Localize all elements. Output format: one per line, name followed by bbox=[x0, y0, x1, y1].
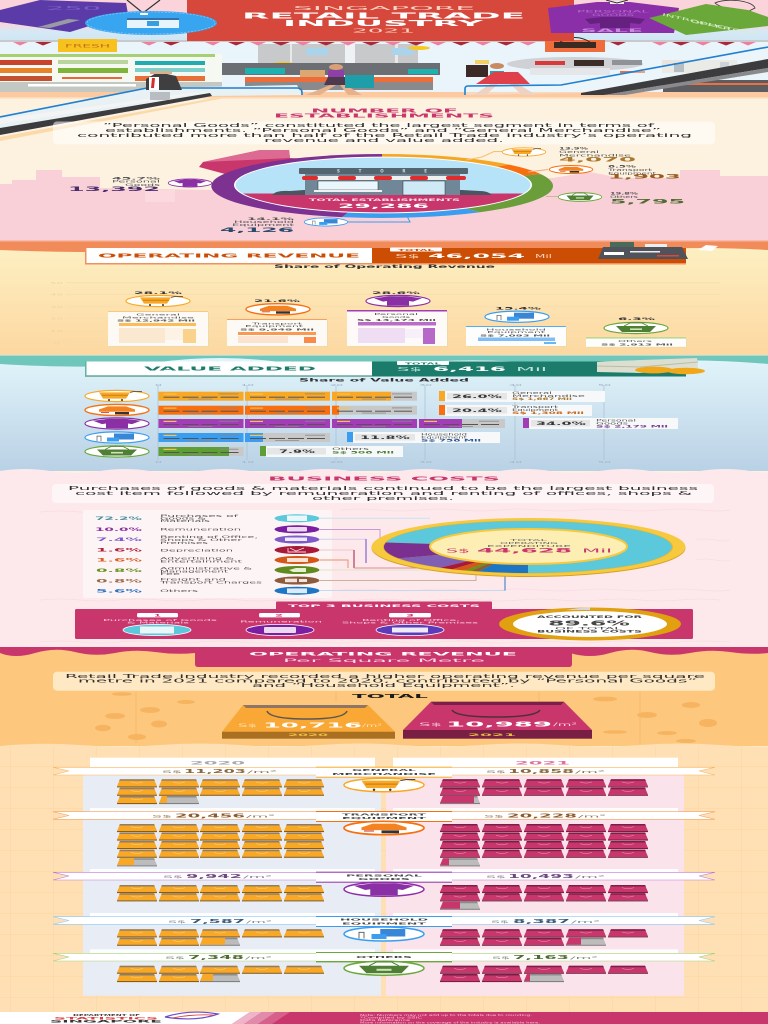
cost row: others: 5.6% bbox=[96, 588, 143, 594]
store illustration bbox=[299, 168, 468, 195]
row: transport equipment: TRANSPORT bbox=[342, 812, 430, 816]
text block: establishments summary: contributed more than half of the Retail Trade industry’s operating bbox=[77, 133, 693, 139]
column: personal goods: Goods bbox=[382, 315, 411, 319]
tag: blue price tag bbox=[85, 0, 217, 35]
section background: revenue per square metre bbox=[0, 647, 768, 746]
axis labels: operating revenue: 0 bbox=[53, 342, 61, 346]
row: household equipment: /m² bbox=[246, 920, 274, 924]
callout: household equipment: 4,126 bbox=[220, 226, 296, 234]
heading tab: operating revenue per square metre: OPERATING REVENUE bbox=[249, 652, 517, 658]
column: general merchandise: Merchandise bbox=[122, 315, 195, 319]
pink city skyline bbox=[0, 170, 768, 240]
value added row: transport equipment: Equipment bbox=[512, 408, 560, 412]
text block: business costs summary: cost item followed by remuneration and renting of offices, shops & bbox=[75, 491, 694, 497]
callout: general merchandise: General bbox=[559, 150, 599, 154]
cost row: freight: Freight and bbox=[160, 578, 226, 582]
shopping bag: 2021 total bbox=[403, 702, 592, 739]
panel: 2020 column: 2020 bbox=[190, 761, 245, 767]
column: household equipment: Household bbox=[486, 327, 546, 331]
top cost 3: Renting of Office, bbox=[362, 618, 460, 622]
axis labels: value added: 30 bbox=[419, 460, 433, 464]
pie chart: operating expenditure bbox=[372, 518, 686, 577]
top cost 3 bbox=[342, 613, 480, 636]
tag: personal goods sale: PERSONAL bbox=[577, 10, 649, 14]
logo: department of statistics singapore bbox=[50, 1012, 218, 1023]
axis labels: value added: 40 bbox=[509, 460, 523, 464]
callout: accounted for 89.6%: ACCOUNTED FOR bbox=[537, 615, 643, 619]
cost row: renting: Renting of Office, bbox=[160, 535, 258, 539]
icon: banknotes and coins bbox=[597, 358, 705, 374]
header bar: operating revenue bbox=[85, 248, 686, 264]
cost row: freight bbox=[96, 576, 320, 585]
panel: cost list bbox=[83, 510, 332, 598]
header: supermarket shelves bbox=[0, 54, 222, 92]
callout: personal goods: 45.7% bbox=[112, 176, 162, 180]
footer notes: Note: Numbers may not add up to the totals due to rounding. bbox=[360, 1014, 533, 1017]
cost row: freight: 0.8% bbox=[96, 578, 143, 584]
cost row: administrative: 0.8% bbox=[96, 568, 143, 574]
value added row: others bbox=[85, 446, 403, 457]
cost row: purchases bbox=[95, 514, 320, 523]
callout: household equipment: 14.1% bbox=[247, 217, 296, 221]
value added row: household equipment: S$ 756 Mil bbox=[421, 439, 481, 443]
cost row: renting: Premises bbox=[160, 541, 209, 545]
top cost 1: 1 bbox=[154, 614, 161, 618]
row: personal goods bbox=[53, 872, 715, 910]
row: others: 7,163 bbox=[513, 955, 569, 961]
row: general merchandise: /m² bbox=[575, 770, 608, 774]
header bar: operating revenue: OPERATING REVENUE bbox=[98, 253, 362, 259]
row: others: OTHERS bbox=[356, 955, 412, 959]
row: household equipment: HOUSEHOLD bbox=[340, 918, 430, 922]
axis labels: operating revenue bbox=[50, 281, 64, 346]
cost row: remuneration bbox=[95, 525, 320, 533]
shopping bag: 2021 total: 2021 bbox=[468, 732, 518, 737]
total establishments bbox=[309, 198, 462, 210]
cost row: advertising: Advertising & bbox=[160, 557, 236, 561]
shopping bag: 2020 total bbox=[222, 705, 395, 739]
panel: 2020 column bbox=[83, 758, 381, 996]
tag: green introductory offer: INTRODUCTORY bbox=[662, 13, 759, 37]
value added row: general merchandise: S$ 1,667 Mil bbox=[512, 397, 572, 401]
sign: basket bbox=[545, 38, 605, 52]
row: transport equipment: S$ bbox=[484, 815, 504, 819]
value added row: general merchandise: 26.0% bbox=[452, 394, 502, 399]
value added row: household equipment: Equipment bbox=[421, 436, 469, 440]
cost row: remuneration: Remuneration bbox=[160, 528, 241, 532]
cost row: freight: Transport Charges bbox=[156, 581, 263, 585]
panel: 2021 column bbox=[386, 758, 684, 996]
tag: purple phone tag: 250 bbox=[46, 6, 101, 12]
row: personal goods: /m² bbox=[575, 875, 608, 879]
heading: number of establishments: NUMBER OF bbox=[311, 108, 458, 114]
callout: household equipment: Household bbox=[234, 220, 294, 224]
text block: establishments summary: revenue and value added. bbox=[264, 138, 505, 144]
axis labels: value added: 50 bbox=[598, 460, 612, 464]
axis labels: value added: 20 bbox=[330, 383, 344, 387]
row: general merchandise bbox=[53, 767, 715, 804]
shopping bag: 2020 total: /m² bbox=[362, 723, 383, 729]
value added row: others: S$ 506 Mil bbox=[332, 451, 394, 455]
callout: others: 19.8% bbox=[610, 192, 639, 196]
heading: share of operating revenue: Share of Operating Revenue bbox=[274, 264, 495, 270]
row: household equipment: 7,587 bbox=[190, 919, 245, 925]
title block bbox=[187, 0, 574, 41]
row: general merchandise: S$ bbox=[486, 770, 506, 774]
row: household equipment: /m² bbox=[571, 920, 603, 924]
header bar: operating revenue: 46,054 bbox=[428, 253, 528, 260]
heading: business costs: BUSINESS COSTS bbox=[268, 476, 501, 482]
footer notes bbox=[360, 1014, 541, 1024]
cost row: advertising: Entertainment bbox=[160, 560, 245, 564]
column: transport equipment bbox=[227, 299, 328, 347]
column: others: Others bbox=[618, 339, 653, 343]
top cost 2: 2 bbox=[275, 614, 283, 618]
chart grid: value added bbox=[158, 385, 604, 460]
shopping bag: 2021 total: 10,989 bbox=[446, 720, 553, 728]
row: others: S$ bbox=[492, 956, 510, 960]
callout: others: Others bbox=[610, 195, 639, 199]
callout: general merchandise: 4,070 bbox=[559, 156, 638, 164]
column: household equipment: S$ 7,093 Mil bbox=[480, 333, 550, 337]
header bar: value added bbox=[85, 361, 686, 376]
column: personal goods bbox=[347, 291, 448, 347]
sign: fresh bbox=[58, 39, 117, 52]
axis labels: value added: 40 bbox=[509, 383, 523, 387]
footprints decoration bbox=[95, 692, 717, 743]
value added row: personal goods: S$ 2,179 Mil bbox=[596, 425, 668, 429]
cost row: purchases: Goods & bbox=[160, 516, 208, 520]
row: personal goods: S$ bbox=[163, 875, 183, 879]
pie chart: operating expenditure: S$ bbox=[446, 548, 471, 554]
title block: SINGAPORE bbox=[293, 6, 478, 12]
logo: department of statistics singapore: STATISTICS bbox=[54, 1016, 160, 1020]
row: personal goods: /m² bbox=[243, 875, 275, 879]
value added row: personal goods: Personal bbox=[596, 419, 636, 423]
row: personal goods: 10,493 bbox=[508, 874, 574, 880]
tag: personal goods sale: SALE bbox=[581, 28, 643, 34]
callout: household equipment bbox=[220, 216, 410, 234]
value added row: transport equipment: 20.4% bbox=[452, 408, 502, 413]
man on escalator bbox=[146, 71, 182, 100]
top cost 1: & Materials bbox=[127, 620, 191, 624]
callout: transport equipment: 6.5% bbox=[608, 164, 638, 168]
white strips between rows bbox=[90, 808, 678, 953]
column: general merchandise: 28.1% bbox=[134, 291, 184, 295]
column: transport equipment: Transport bbox=[248, 321, 305, 325]
axis labels: operating revenue: 10 bbox=[50, 329, 64, 333]
total establishments: TOTAL ESTABLISHMENTS bbox=[309, 198, 462, 202]
column: transport equipment: Equipment bbox=[245, 324, 306, 328]
callout: personal goods: Goods bbox=[125, 183, 161, 187]
cost row: depreciation: 1.6% bbox=[96, 548, 143, 554]
connector lines bbox=[320, 518, 505, 590]
text block: revenue per square metre summary bbox=[53, 672, 715, 691]
total establishments: 29,286 bbox=[338, 202, 431, 210]
callout: household equipment: Equipment bbox=[232, 223, 296, 227]
callout: transport equipment: Equipment bbox=[608, 171, 658, 175]
cost row: purchases: Materials bbox=[160, 519, 211, 523]
text block: revenue per square metre summary: and “Household Equipment”. bbox=[252, 683, 516, 689]
callout: general merchandise: Merchandise bbox=[559, 153, 631, 157]
axis labels: operating revenue: 50 bbox=[50, 281, 64, 285]
woman in red dress bbox=[466, 60, 536, 95]
row: transport equipment: S$ bbox=[152, 815, 172, 819]
heading: number of establishments bbox=[274, 108, 496, 119]
cost row: remuneration: 10.0% bbox=[95, 527, 143, 533]
callout: accounted for 89.6%: OF TOTAL bbox=[555, 626, 623, 630]
axis labels: operating revenue: 20 bbox=[50, 317, 64, 321]
cost row: advertising bbox=[96, 556, 320, 564]
row: general merchandise: 10,858 bbox=[508, 769, 576, 775]
row: others: /m² bbox=[245, 956, 274, 960]
tag: personal goods sale bbox=[548, 0, 679, 34]
row: transport equipment: 20,228 bbox=[507, 814, 579, 820]
pie chart: operating expenditure: OPERATING bbox=[500, 541, 560, 545]
value added row: others: 7.9% bbox=[279, 449, 315, 454]
callout: transport equipment: Transport bbox=[605, 168, 654, 172]
cost row: administrative: Management bbox=[160, 569, 230, 573]
callout: personal goods bbox=[68, 176, 212, 193]
cost row: administrative bbox=[96, 566, 320, 576]
row: general merchandise: MERCHANDISE bbox=[332, 772, 436, 776]
footer notes: *Compiled by SSIC bbox=[360, 1016, 423, 1019]
row: household equipment: EQUIPMENT bbox=[342, 921, 430, 925]
left escalator bbox=[0, 85, 302, 141]
row: household equipment bbox=[53, 916, 715, 946]
row: others: S$ bbox=[165, 956, 185, 960]
column: household equipment: 15.4% bbox=[495, 306, 542, 310]
cost row: purchases: Purchases of bbox=[160, 514, 241, 518]
value added row: others: Others bbox=[332, 447, 370, 451]
value added row: household equipment: Household bbox=[421, 433, 467, 437]
shopping bag: 2020 total: 2020 bbox=[288, 732, 329, 737]
pie chart: operating expenditure: TOTAL bbox=[506, 538, 548, 542]
cost row: depreciation: Depreciation bbox=[160, 548, 233, 552]
section background: value added bbox=[0, 355, 768, 471]
axis labels: value added: 10 bbox=[241, 383, 255, 387]
header bar: operating revenue: TOTAL bbox=[398, 248, 435, 252]
axis labels: operating revenue: 30 bbox=[50, 305, 64, 309]
panel: top 3 business costs bbox=[75, 602, 693, 639]
axis labels: value added: 50 bbox=[598, 383, 612, 387]
cost row: renting bbox=[96, 535, 320, 545]
logo: department of statistics singapore: SINGAPORE bbox=[50, 1019, 162, 1023]
axis labels: value added: 10 bbox=[241, 460, 255, 464]
header bar: value added: 6,416 bbox=[433, 366, 506, 373]
value added row: personal goods: Goods bbox=[596, 422, 629, 426]
shopping bag: 2021 total: S$ bbox=[419, 722, 442, 728]
woman with box bbox=[300, 64, 374, 95]
tag: purple phone tag bbox=[0, 0, 128, 32]
row: household equipment: S$ bbox=[168, 920, 186, 924]
sign: fresh: FRESH bbox=[65, 44, 110, 48]
axis labels: value added: 20 bbox=[330, 460, 344, 464]
right escalator bbox=[465, 47, 768, 95]
value added row: personal goods bbox=[85, 418, 678, 429]
escalator glass, right bbox=[464, 48, 768, 95]
row: transport equipment bbox=[53, 811, 715, 866]
value added row: personal goods: 34.0% bbox=[536, 421, 586, 426]
column: others: S$ 2,913 Mil bbox=[601, 342, 673, 346]
callout: others bbox=[546, 192, 685, 205]
callout: accounted for 89.6%: BUSINESS COSTS bbox=[537, 630, 644, 634]
axis labels: value added: 0 bbox=[155, 383, 163, 387]
column: others bbox=[586, 317, 687, 348]
value added row: general merchandise bbox=[85, 390, 605, 402]
cost row: others bbox=[96, 587, 320, 595]
header bar: operating revenue: Mil bbox=[535, 254, 553, 260]
value added row: transport equipment: Transport bbox=[509, 405, 560, 409]
column: transport equipment: 21.6% bbox=[254, 299, 301, 303]
chart grid: operating revenue bbox=[66, 283, 720, 343]
footer bbox=[0, 1012, 768, 1024]
heading: share of value added: Share of Value Added bbox=[299, 378, 469, 384]
heading: total: TOTAL bbox=[352, 694, 431, 700]
text block: revenue per square metre summary: Retail Trade industry recorded a higher operating revenue per square bbox=[65, 674, 707, 680]
section background: comparison grid bbox=[0, 744, 768, 1012]
section background: operating revenue bbox=[0, 240, 768, 356]
row: general merchandise: GENERAL bbox=[352, 768, 416, 772]
callout: personal goods: Personal bbox=[112, 180, 160, 184]
cost row: depreciation bbox=[96, 546, 320, 554]
value added row: household equipment: 11.8% bbox=[360, 435, 410, 440]
callout: transport equipment bbox=[528, 164, 681, 180]
icon: cash register bbox=[598, 242, 718, 259]
cost row: renting: Shops & Other bbox=[160, 538, 244, 542]
axis labels: value added bbox=[155, 383, 612, 464]
header: shop scene bbox=[0, 0, 768, 95]
cost row: administrative: Fee bbox=[160, 572, 180, 576]
row: personal goods: 9,942 bbox=[186, 874, 242, 880]
row: personal goods: PERSONAL bbox=[346, 873, 422, 877]
row: personal goods: GOODS bbox=[358, 877, 410, 881]
pie chart: operating expenditure: EXPENDITURE bbox=[487, 544, 571, 548]
value added row: transport equipment bbox=[85, 404, 592, 416]
row: transport equipment: /m² bbox=[246, 815, 278, 819]
text block: establishments summary bbox=[53, 122, 715, 144]
header bar: operating revenue: S$ bbox=[395, 254, 422, 260]
column: others: 6.3% bbox=[618, 317, 656, 321]
column: transport equipment: S$ 9,949 Mil bbox=[240, 327, 314, 331]
top cost 1: Purchases of Goods bbox=[103, 618, 219, 622]
row: others: /m² bbox=[570, 956, 601, 960]
donut chart: establishments bbox=[199, 150, 553, 218]
shopping bag: 2020 total: S$ bbox=[238, 723, 258, 729]
callout: transport equipment: 1,903 bbox=[608, 174, 681, 180]
column: general merchandise bbox=[108, 291, 209, 347]
floor bbox=[0, 92, 768, 98]
column: general merchandise: General bbox=[136, 312, 181, 316]
value added row: general merchandise: Merchandise bbox=[512, 394, 585, 398]
value added row: general merchandise: General bbox=[512, 391, 552, 395]
header bar: value added: S$ bbox=[397, 367, 424, 373]
column: personal goods: 28.6% bbox=[372, 291, 422, 295]
shopping bag: 2020 total: 10,716 bbox=[263, 722, 364, 730]
row: transport equipment: 20,456 bbox=[175, 814, 247, 820]
text block: establishments summary: “Personal Goods” constituted the largest segment in terms of bbox=[103, 123, 657, 129]
text block: revenue per square metre summary: metre in 2021 compared to 2020, contributed by “Personal Goods” bbox=[78, 679, 697, 685]
text block: business costs summary bbox=[52, 484, 714, 503]
cost row: administrative: Administrative & bbox=[160, 567, 254, 571]
shopping bag: 2021 total: /m² bbox=[553, 722, 577, 728]
callout: accounted for 89.6%: 89.6% bbox=[548, 620, 631, 628]
panel: 2021 column: 2021 bbox=[515, 761, 570, 767]
header bar: value added: Mil bbox=[516, 367, 549, 373]
callout: accounted for 89.6% bbox=[499, 608, 681, 640]
heading tab: operating revenue per square metre bbox=[195, 650, 572, 667]
row: others: 7,348 bbox=[188, 955, 246, 961]
column: household equipment bbox=[466, 306, 567, 347]
callout: others: 5,795 bbox=[610, 198, 685, 205]
callout: general merchandise: 13.9% bbox=[559, 146, 589, 150]
row: others bbox=[53, 952, 715, 982]
pie chart: operating expenditure: Mil bbox=[582, 548, 614, 554]
top cost 2: Remuneration bbox=[240, 619, 322, 623]
pie chart: operating expenditure: 44,628 bbox=[477, 547, 574, 555]
title block: INDUSTRY bbox=[283, 18, 487, 28]
heading: number of establishments: ESTABLISHMENTS bbox=[274, 113, 496, 119]
top cost 3: Shops & Other Premises bbox=[342, 620, 480, 624]
title block: RETAIL TRADE bbox=[242, 11, 526, 21]
callout: general merchandise bbox=[466, 146, 638, 164]
row: general merchandise: S$ bbox=[162, 770, 182, 774]
heading tab: operating revenue per square metre: Per Square Metre bbox=[283, 658, 487, 664]
header bar: value added: VALUE ADDED bbox=[144, 366, 316, 372]
top cost 2 bbox=[240, 613, 322, 636]
cost row: purchases: 72.2% bbox=[95, 516, 143, 522]
bunting bbox=[13, 42, 756, 46]
row: household equipment: S$ bbox=[491, 920, 509, 924]
row: general merchandise: 11,203 bbox=[184, 769, 246, 775]
tag: personal goods sale: GOODS bbox=[592, 13, 636, 17]
column: personal goods: S$ 13,174 Mil bbox=[357, 318, 436, 322]
column: general merchandise: S$ 12,942 Mil bbox=[117, 319, 195, 323]
row: general merchandise: /m² bbox=[247, 770, 280, 774]
row: transport equipment: /m² bbox=[578, 815, 609, 819]
axis labels: operating revenue: 40 bbox=[50, 293, 64, 297]
axis labels: value added: 0 bbox=[155, 460, 163, 464]
panel: top 3 business costs: TOP 3 BUSINESS COSTS bbox=[288, 603, 481, 608]
tag: green introductory offer bbox=[649, 0, 768, 37]
top cost 3: 3 bbox=[406, 614, 414, 618]
callout: personal goods: 13,392 bbox=[68, 185, 160, 193]
row: transport equipment: EQUIPMENT bbox=[342, 816, 430, 820]
footer notes: Data Reference bbox=[360, 1019, 411, 1022]
column: household equipment: Equipment bbox=[487, 330, 548, 334]
text block: establishments summary: establishments. “Personal Goods” and “General Merchandise” bbox=[105, 128, 661, 134]
logo: department of statistics singapore: DEPARTMENT OF bbox=[73, 1013, 141, 1017]
store illustration: STORE bbox=[337, 169, 427, 174]
section background: business costs bbox=[0, 469, 768, 650]
title block: 2021 bbox=[352, 29, 415, 35]
tag: green introductory offer: OFFER bbox=[690, 19, 733, 32]
row: personal goods: S$ bbox=[486, 875, 506, 879]
row: household equipment: 8,387 bbox=[513, 919, 570, 925]
text block: business costs summary: other premises. bbox=[312, 496, 455, 502]
text block: business costs summary: Purchases of goods & materials continued to be the largest business bbox=[68, 486, 698, 492]
axis labels: value added: 30 bbox=[419, 383, 433, 387]
top cost 1 bbox=[103, 613, 219, 636]
cost row: advertising: 1.6% bbox=[96, 558, 143, 564]
value added row: household equipment bbox=[85, 432, 500, 443]
cost row: renting: 7.4% bbox=[96, 537, 143, 543]
value added row: transport equipment: S$ 1,308 Mil bbox=[512, 411, 584, 415]
cost row: others: Others bbox=[160, 589, 199, 593]
header bar: value added: TOTAL bbox=[405, 361, 442, 365]
column: personal goods: Personal bbox=[374, 312, 419, 316]
